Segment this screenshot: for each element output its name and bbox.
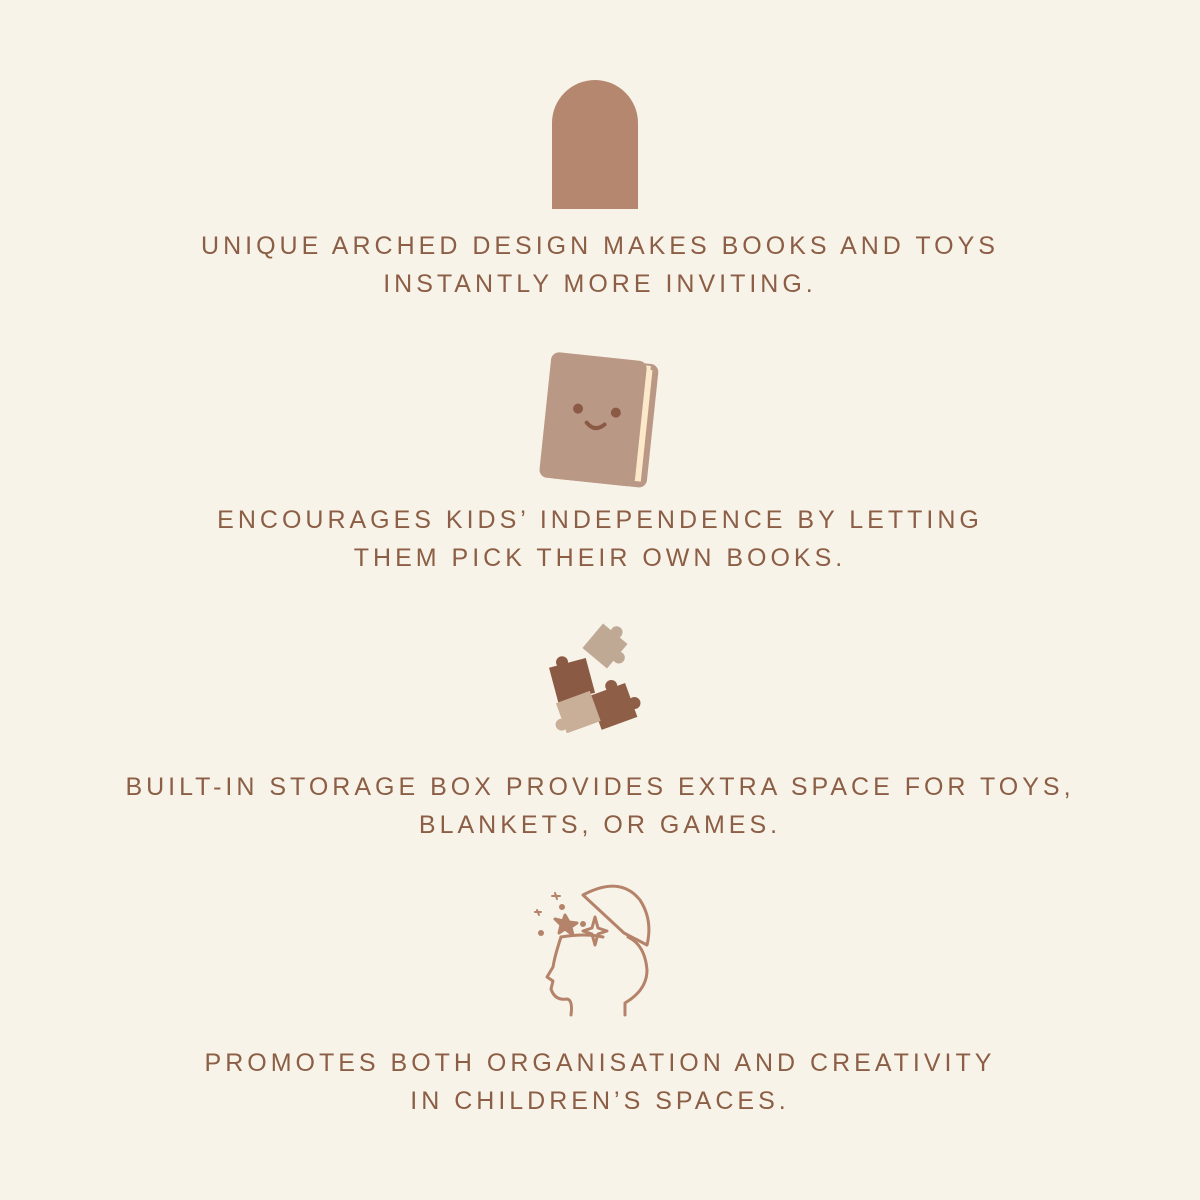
text: organisation and creativity: PROMOTES BOTH ORGANISATION AND CREATIVITY [205, 1049, 995, 1077]
text: organisation and creativity: IN CHILDREN’S SPACES. [410, 1087, 790, 1115]
text: arched design: UNIQUE ARCHED DESIGN MAKES BOOKS AND TOYS [201, 232, 999, 260]
text: independence [217, 506, 983, 572]
text: organisation and creativity [205, 1049, 995, 1115]
text: independence: ENCOURAGES KIDS’ INDEPENDENCE BY LETTING [217, 506, 983, 534]
icon: smiling book [540, 352, 658, 488]
icon: open head with sparkles [534, 884, 650, 1016]
text: storage box: BUILT-IN STORAGE BOX PROVIDES EXTRA SPACE FOR TOYS, [125, 773, 1075, 801]
icon: arch [552, 80, 638, 209]
text: storage box: BLANKETS, OR GAMES. [419, 811, 781, 839]
text: storage box [125, 773, 1075, 839]
text: arched design [201, 232, 999, 298]
icon: puzzle pieces [549, 624, 640, 733]
text: arched design: INSTANTLY MORE INVITING. [383, 270, 817, 298]
text: independence: THEM PICK THEIR OWN BOOKS. [354, 544, 846, 572]
